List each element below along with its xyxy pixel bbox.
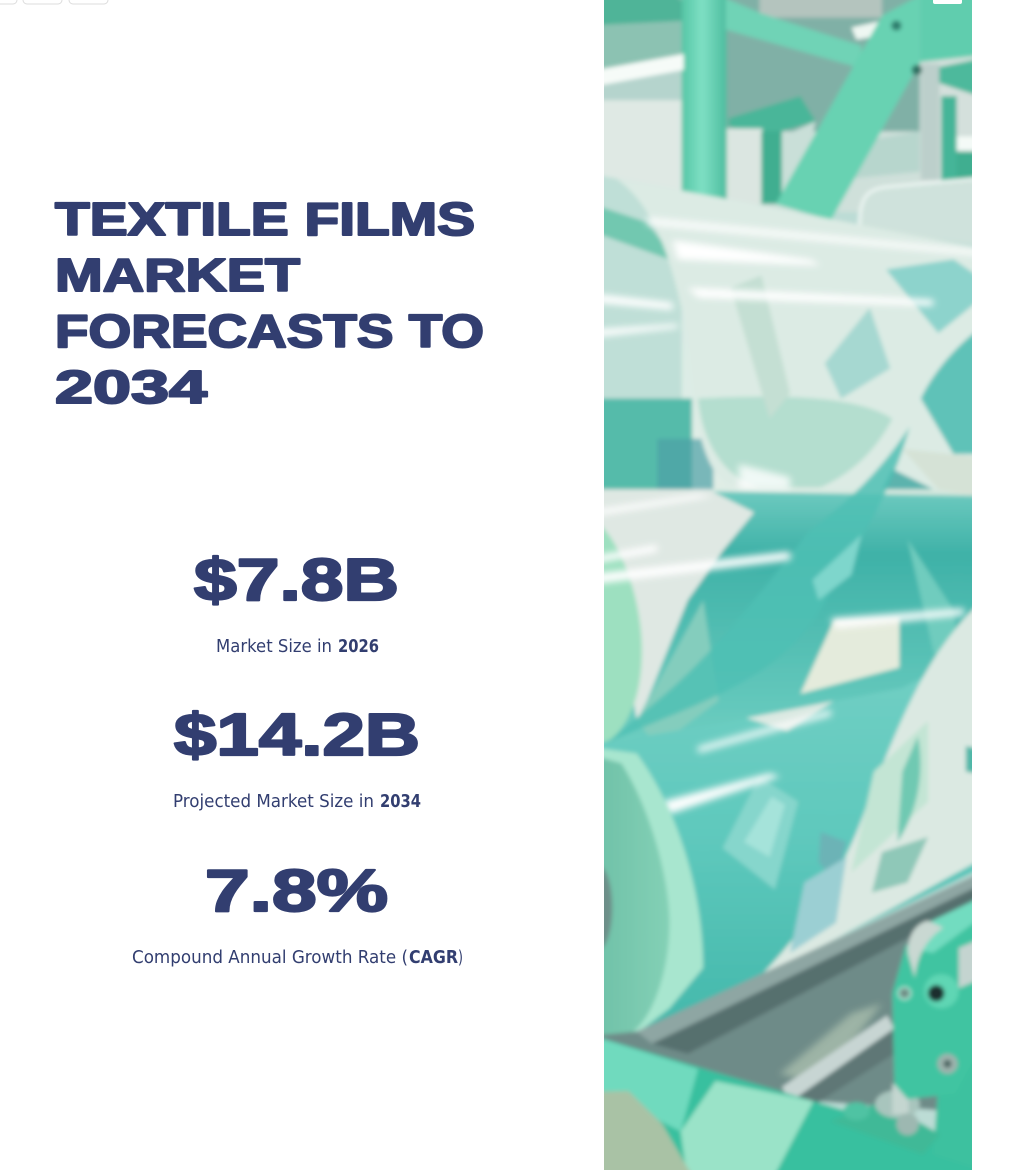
film roll top xyxy=(604,175,972,498)
stat: market size 2026: Market Size in xyxy=(216,636,332,657)
white marker xyxy=(933,0,962,4)
title: TEXTILE FILMS xyxy=(55,193,475,245)
title xyxy=(55,193,484,413)
title: 2034 xyxy=(55,361,208,413)
stat: market size 2026: 2026 xyxy=(338,636,379,657)
factory background xyxy=(604,0,972,244)
stat: CAGR: Compound Annual Growth Rate ( xyxy=(132,947,408,968)
stat: projected market size 2034: Projected Market Size in xyxy=(173,791,374,812)
stat: projected market size 2034 xyxy=(173,702,421,812)
lower roll xyxy=(604,605,972,1038)
metal tray xyxy=(604,874,972,1112)
stat: market size 2026 xyxy=(194,547,399,657)
stat: CAGR: CAGR xyxy=(409,947,458,968)
stat: market size 2026: $7.8B xyxy=(194,547,399,613)
stat: projected market size 2034: $14.2B xyxy=(174,702,420,768)
stat: CAGR xyxy=(132,858,463,968)
browser tab remnants xyxy=(0,0,108,4)
stat: CAGR: 7.8% xyxy=(205,858,388,924)
machine frame xyxy=(604,898,972,1170)
stat: projected market size 2034: 2034 xyxy=(380,791,421,812)
title: MARKET xyxy=(55,249,300,301)
photo: textile film rolls on teal machine xyxy=(604,0,972,1170)
stat: CAGR: ) xyxy=(458,947,463,968)
middle roll xyxy=(604,428,972,746)
title: FORECASTS TO xyxy=(55,305,484,357)
